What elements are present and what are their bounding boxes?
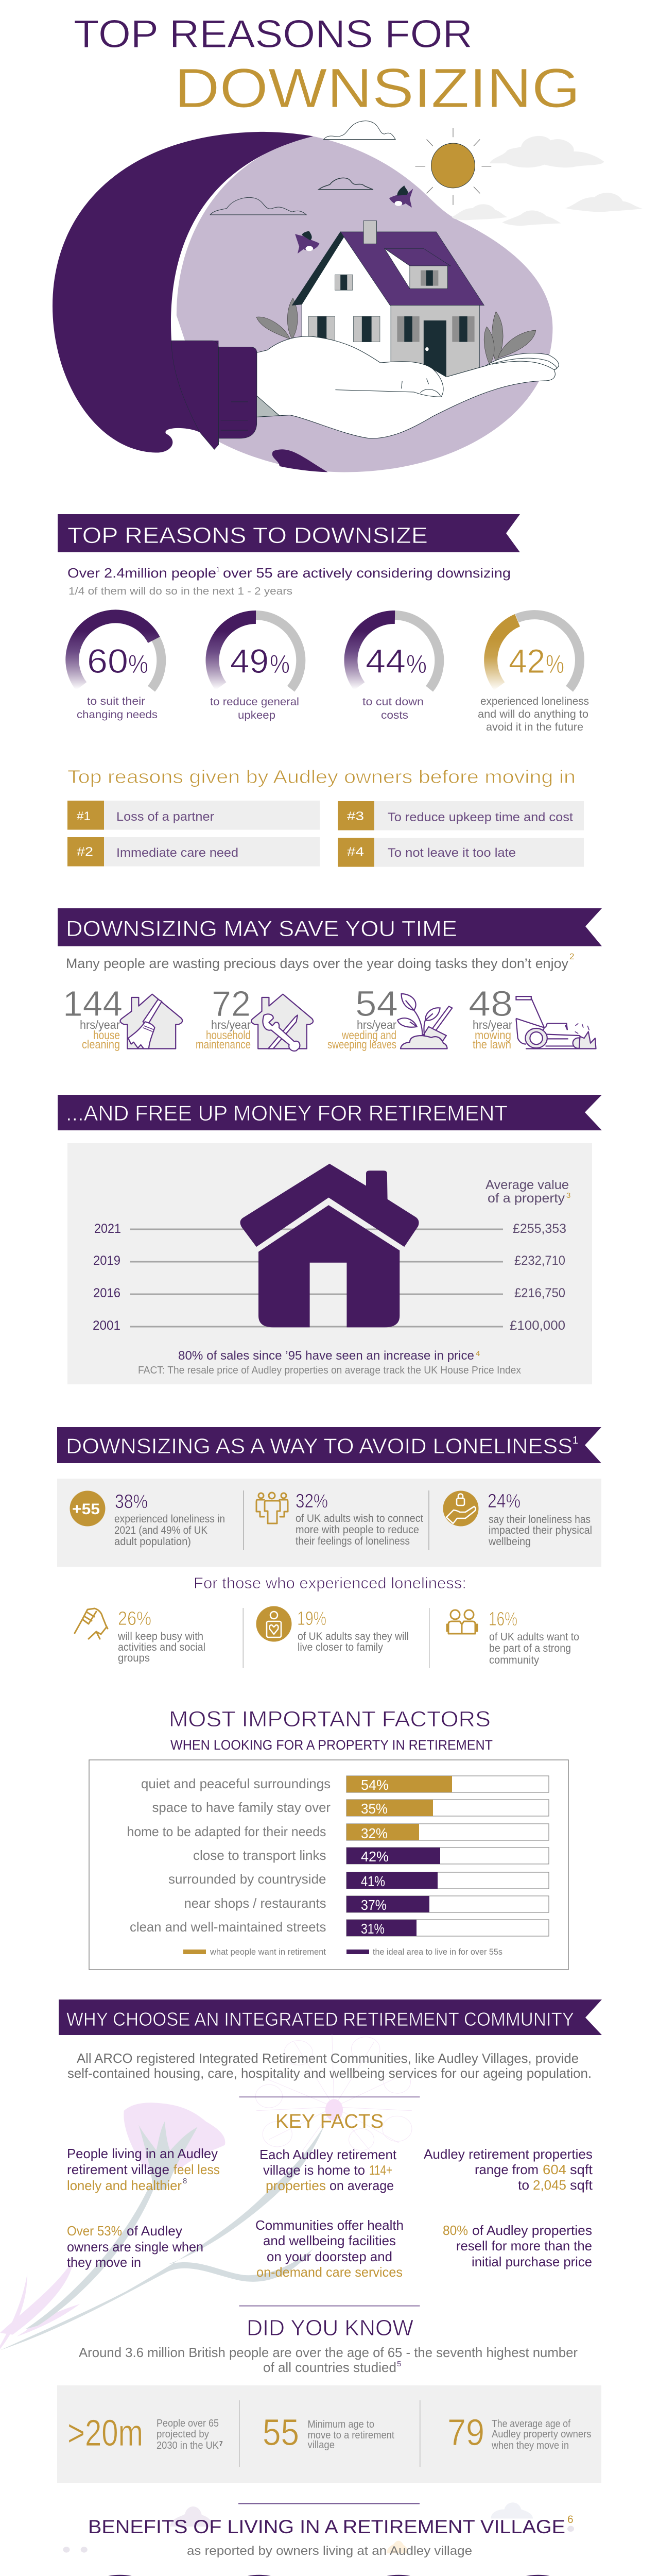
stat: 79 bbox=[447, 2412, 591, 2453]
intro paragraph: All ARCO registered Integrated Retirement Communities, like Audley Villages, provide bbox=[77, 2050, 579, 2066]
donut: 49% bbox=[210, 615, 301, 721]
stat: 54 hrs weeding: weeding and bbox=[341, 1028, 396, 1042]
stat: 48 hrs mowing: hrs/year bbox=[473, 1018, 512, 1031]
heading: most important factors bbox=[169, 1707, 493, 1753]
fact: 80% resell: 80% bbox=[443, 2223, 468, 2238]
section banner: loneliness bbox=[57, 1427, 601, 1463]
reason list: #2 bbox=[77, 845, 93, 859]
did you know heading: of all countries studied bbox=[263, 2360, 396, 2375]
donut: 60% bbox=[72, 616, 161, 721]
panel: did you know stats bbox=[57, 2385, 601, 2483]
value labels: £100,000 bbox=[510, 1318, 565, 1333]
fact: feel less lonely bbox=[67, 2146, 220, 2193]
value labels: Average value bbox=[485, 1178, 569, 1192]
donut: 42%: 42 bbox=[509, 642, 545, 680]
stat: 144 hrs house cleaning: 144 bbox=[63, 984, 123, 1024]
legend bbox=[183, 1947, 502, 1957]
reason list: Immediate care need bbox=[116, 846, 238, 860]
value labels: £255,353 bbox=[513, 1222, 566, 1236]
fact: property range bbox=[424, 2146, 593, 2193]
illustration: hand holding house bbox=[53, 121, 643, 472]
did you know heading: DID YOU KNOW bbox=[247, 2315, 413, 2341]
stat: 79: 79 bbox=[447, 2412, 484, 2453]
fact: feel less lonely: lonely and healthier bbox=[67, 2178, 182, 2193]
benefits heading bbox=[88, 2514, 574, 2558]
donut: 42% bbox=[478, 615, 589, 733]
fact: feel less lonely: People living in an Audley bbox=[67, 2146, 218, 2161]
stat: 54 hrs weeding: 54 bbox=[355, 984, 398, 1024]
fact: 80% resell bbox=[443, 2223, 592, 2269]
stat: 54 hrs weeding bbox=[327, 984, 452, 1051]
house bbox=[292, 221, 484, 377]
decorative village scene bbox=[0, 2502, 659, 2576]
stat: 24%: impacted their physical bbox=[489, 1524, 592, 1536]
year labels: 2016 bbox=[93, 1286, 120, 1300]
line above benefits bbox=[238, 2503, 420, 2504]
value labels: £232,710 bbox=[514, 1253, 565, 1268]
price note: 4 bbox=[476, 1349, 480, 1358]
bar chart: important factors: quiet and peaceful surroundings bbox=[141, 1776, 331, 1791]
bar chart: important factors: 31% bbox=[361, 1921, 385, 1937]
bar chart: important factors: 42% bbox=[361, 1849, 389, 1865]
icon: plant and shovel bbox=[397, 994, 452, 1049]
intro statement bbox=[67, 565, 511, 597]
fact: feel less lonely: retirement village bbox=[67, 2162, 169, 2177]
section banner: integrated retirement community bbox=[59, 1999, 602, 2035]
stat: 16%: community bbox=[489, 1654, 539, 1666]
panel: average property value bbox=[67, 1143, 592, 1384]
year labels: 2001 bbox=[93, 1318, 120, 1333]
bar chart: important factors: near shops / restaurants bbox=[184, 1895, 326, 1911]
price note bbox=[138, 1349, 521, 1376]
stat: 38%: experienced loneliness in bbox=[114, 1513, 225, 1525]
donut: 42%: avoid it in the future bbox=[486, 721, 583, 733]
fact: property range: Audley retirement properties bbox=[424, 2146, 593, 2162]
reason list: To reduce upkeep time and cost bbox=[388, 810, 573, 824]
section banner: free up money: ...AND FREE UP MONEY FOR RETIREMENT bbox=[66, 1101, 508, 1125]
did you know heading bbox=[79, 2306, 578, 2375]
stat: 72 hrs household maintenance: maintenance bbox=[196, 1038, 251, 1051]
fact: property range: 2,045 bbox=[533, 2177, 566, 2193]
stat: 16% bbox=[447, 1608, 579, 1666]
fact: 114+ properties: on average bbox=[330, 2178, 394, 2193]
fact: health and wellbeing bbox=[255, 2217, 404, 2280]
stat: 32% bbox=[256, 1490, 423, 1547]
stat: 55: village bbox=[308, 2439, 335, 2451]
donut: 44%: 44 bbox=[366, 642, 406, 680]
reason list bbox=[67, 801, 584, 867]
benefits heading: BENEFITS OF LIVING IN A RETIREMENT VILLAGE bbox=[88, 2516, 565, 2537]
donut: 42%: and will do anything to bbox=[478, 708, 588, 720]
stat: 32%: their feelings of loneliness bbox=[296, 1535, 410, 1547]
fact: 114+ properties: 114+ bbox=[369, 2162, 392, 2178]
donut: 44%: to cut down bbox=[362, 696, 424, 708]
cuff bbox=[171, 341, 257, 449]
reason list: #4 bbox=[347, 845, 364, 859]
heading: most important factors: WHEN LOOKING FOR A PROPERTY IN RETIREMENT bbox=[170, 1737, 493, 1753]
section banner: loneliness: DOWNSIZING AS A WAY TO AVOID LONELINESS bbox=[66, 1434, 573, 1458]
sleeve lower fold bbox=[272, 449, 328, 472]
donut: 60%: to suit their bbox=[87, 696, 145, 707]
stat: 26% bbox=[75, 1608, 205, 1664]
bar chart: important factors: surrounded by countryside bbox=[168, 1871, 326, 1887]
icon: three people bbox=[256, 1493, 288, 1523]
stat: 19%: live closer to family bbox=[298, 1641, 383, 1653]
benefits heading: as reported by owners living at an Audley village bbox=[187, 2544, 472, 2558]
section banner: loneliness: 1 bbox=[573, 1435, 578, 1446]
bar chart: important factors: home to be adapted for their needs bbox=[127, 1824, 326, 1839]
value labels bbox=[485, 1178, 570, 1333]
blob background bbox=[177, 136, 552, 472]
stat: 19%: 19% bbox=[297, 1608, 326, 1630]
bar chart: important factors: space to have family stay over bbox=[152, 1800, 331, 1815]
key facts heading: KEY FACTS bbox=[275, 2111, 384, 2132]
clouds outlined bbox=[210, 121, 395, 215]
fact: 53% single: they move in bbox=[67, 2255, 141, 2270]
stat: 19%: of UK adults say they will bbox=[298, 1631, 409, 1642]
time intro: 2 bbox=[569, 952, 574, 961]
fact: 53% single: owners are single when bbox=[67, 2239, 203, 2255]
stat: 38%: 38% bbox=[115, 1491, 148, 1513]
donut: 42%: experienced loneliness bbox=[480, 696, 589, 707]
fact: property range: to bbox=[518, 2177, 529, 2193]
did you know heading: Around 3.6 million British people are over the age of 65 - the seventh highest number bbox=[79, 2345, 578, 2360]
stat: 144 hrs house cleaning: house bbox=[93, 1028, 120, 1042]
price note: FACT: The resale price of Audley properties on average track the UK House Price Index bbox=[138, 1365, 521, 1376]
fact: health and wellbeing: on your doorstep and bbox=[267, 2249, 392, 2264]
reason list: Loss of a partner bbox=[116, 810, 214, 824]
reason list: To not leave it too late bbox=[388, 846, 516, 860]
stat: 144 hrs house cleaning: hrs/year bbox=[80, 1018, 120, 1031]
stat: 79: Audley property owners bbox=[492, 2429, 591, 2440]
plants bbox=[256, 298, 536, 364]
section banner: integrated retirement community: WHY CHOOSE AN INTEGRATED RETIREMENT COMMUNITY bbox=[66, 2009, 574, 2030]
fact: property range: range from bbox=[475, 2162, 539, 2177]
stat: 38%: 2021 (and 49% of UK bbox=[114, 1524, 207, 1536]
section banner: save you time: DOWNSIZING MAY SAVE YOU TIME bbox=[66, 917, 457, 941]
sun bbox=[431, 143, 475, 188]
stat: 72 hrs household maintenance: hrs/year bbox=[211, 1018, 251, 1031]
value labels: 3 bbox=[566, 1191, 570, 1200]
fact: 114+ properties: village is home to bbox=[263, 2162, 365, 2178]
bar chart: important factors: clean and well-maintained streets bbox=[130, 1919, 326, 1935]
stat: 54 hrs weeding: hrs/year bbox=[357, 1018, 396, 1031]
bar chart: important factors: 41% bbox=[361, 1873, 385, 1889]
stat: 54 hrs weeding: sweeping leaves bbox=[327, 1038, 396, 1051]
intro statement: 1 bbox=[216, 566, 220, 573]
stat: 32%: more with people to reduce bbox=[296, 1524, 419, 1536]
stat: over 20m: 7 bbox=[219, 2440, 223, 2447]
key facts bbox=[67, 2146, 593, 2280]
stat: 48 hrs mowing: the lawn bbox=[473, 1038, 511, 1051]
clouds and dots bbox=[170, 2506, 212, 2527]
stat: 32%: of UK adults wish to connect bbox=[296, 1513, 423, 1524]
fact: 80% resell: resell for more than the bbox=[456, 2238, 592, 2253]
fact: 114+ properties: Each Audley retirement bbox=[259, 2147, 397, 2162]
heading: for those who experienced loneliness: For those who experienced loneliness: bbox=[194, 1574, 466, 1592]
donut: 49%: % bbox=[270, 650, 290, 679]
section banner: save you time bbox=[58, 908, 602, 946]
intro statement: over 55 are actively considering downsizing bbox=[223, 565, 511, 581]
fact: health and wellbeing: Communities offer health bbox=[255, 2217, 404, 2233]
section banner: top reasons to downsize: TOP REASONS TO DOWNSIZE bbox=[67, 523, 428, 548]
row: loneliness responses bbox=[75, 1606, 579, 1668]
donut: 49%: upkeep bbox=[238, 709, 275, 721]
stat: 24%: say their loneliness has bbox=[489, 1514, 591, 1526]
reason list: #1 bbox=[77, 809, 91, 823]
heading: most important factors: MOST IMPORTANT FACTORS bbox=[169, 1707, 491, 1732]
icon: hand with lock bbox=[446, 1494, 476, 1523]
legend: the ideal area to live in for over 55s bbox=[373, 1947, 502, 1957]
value labels: of a property bbox=[488, 1191, 565, 1206]
stat: 26%: activities and social bbox=[118, 1641, 205, 1653]
stat: 24%: 24% bbox=[488, 1490, 521, 1512]
year labels bbox=[93, 1222, 121, 1333]
fact: health and wellbeing: and wellbeing facilities bbox=[263, 2233, 396, 2248]
stat: 144 hrs house cleaning: cleaning bbox=[82, 1038, 120, 1051]
stat: 16%: of UK adults want to bbox=[489, 1631, 579, 1643]
birds bbox=[389, 185, 413, 208]
donut: 60%: changing needs bbox=[77, 709, 158, 721]
stat: 24% bbox=[443, 1490, 592, 1548]
title: TOP REASONS FOR bbox=[74, 12, 473, 56]
stat: 26%: groups bbox=[118, 1652, 150, 1664]
stat: over 20m: 2030 in the UK bbox=[157, 2440, 219, 2451]
fact: property range: 604 bbox=[543, 2162, 566, 2177]
stat: over 20m: projected by bbox=[157, 2429, 209, 2440]
decorative dandelion bbox=[0, 2035, 412, 2350]
stat: 55 bbox=[263, 2412, 394, 2453]
intro paragraph: self-contained housing, care, hospitality and wellbeing services for our ageing population. bbox=[67, 2065, 592, 2081]
bar chart: important factors: close to transport links bbox=[193, 1848, 326, 1863]
section banner: top reasons to downsize bbox=[58, 514, 520, 552]
title: DOWNSIZING bbox=[175, 57, 580, 119]
grey clouds bbox=[452, 136, 643, 226]
bar chart: important factors: 35% bbox=[361, 1801, 388, 1817]
sleeve bbox=[53, 132, 313, 453]
fact: 53% single: of Audley bbox=[127, 2223, 182, 2239]
stat: 38%: adult population) bbox=[114, 1536, 191, 1548]
stat: 38% bbox=[70, 1491, 225, 1548]
year labels: 2021 bbox=[94, 1222, 121, 1236]
stat: over 20m: >20m bbox=[67, 2413, 143, 2454]
fact: 114+ properties bbox=[259, 2147, 397, 2193]
donut: 49%: to reduce general bbox=[210, 696, 299, 708]
reason list: #3 bbox=[347, 809, 364, 823]
fact: 80% resell: of Audley properties bbox=[472, 2223, 592, 2238]
fact: 53% single: Over 53% bbox=[67, 2223, 122, 2239]
stat: 79: when they move in bbox=[491, 2440, 569, 2451]
hand bbox=[257, 396, 280, 417]
legend: what people want in retirement bbox=[210, 1947, 326, 1957]
donut: 42%: % bbox=[546, 650, 564, 679]
panel: loneliness stats bbox=[57, 1479, 601, 1567]
title bbox=[74, 12, 580, 119]
stat: 26%: will keep busy with bbox=[117, 1631, 203, 1642]
icon: couple bbox=[447, 1610, 477, 1634]
donut: 44% bbox=[351, 615, 439, 721]
icon: house with broom bbox=[120, 994, 182, 1049]
section banner: free up money bbox=[58, 1095, 602, 1130]
intro statement: Over 2.4million people bbox=[67, 565, 216, 581]
fact: 114+ properties: properties bbox=[266, 2178, 326, 2193]
donut: 60%: 60 bbox=[87, 642, 128, 680]
stat: 144 hrs house cleaning bbox=[63, 984, 182, 1051]
year labels: 2019 bbox=[93, 1253, 120, 1268]
fact: feel less lonely: 8 bbox=[183, 2177, 187, 2185]
fact: 53% single bbox=[67, 2223, 203, 2270]
benefits heading: 6 bbox=[567, 2514, 574, 2526]
did you know heading: 5 bbox=[397, 2360, 401, 2368]
stat: 72 hrs household maintenance bbox=[196, 984, 313, 1051]
bar chart: important factors: 54% bbox=[361, 1777, 389, 1793]
stat: 24%: wellbeing bbox=[488, 1536, 531, 1548]
stat: 32%: 32% bbox=[296, 1490, 328, 1512]
stat: 19% bbox=[256, 1606, 409, 1653]
stat: over 20m bbox=[67, 2413, 223, 2454]
stat: 55: 55 bbox=[263, 2412, 299, 2453]
stat: 16%: be part of a strong bbox=[489, 1642, 571, 1654]
icon: person with heart bbox=[267, 1612, 281, 1637]
donut: 49%: 49 bbox=[230, 642, 269, 680]
donut: 44%: costs bbox=[381, 709, 408, 721]
stat: 48 hrs mowing bbox=[469, 984, 596, 1051]
bar chart: important factors: 37% bbox=[361, 1897, 387, 1913]
value labels: £216,750 bbox=[514, 1286, 565, 1300]
intro statement: 1/4 of them will do so in the next 1 - 2 years bbox=[68, 586, 292, 597]
donut: 44%: % bbox=[406, 650, 427, 679]
icon: lawn mower bbox=[516, 996, 596, 1049]
stat: 48 hrs mowing: 48 bbox=[469, 984, 513, 1024]
bar chart: important factors bbox=[89, 1760, 568, 1970]
stat: 72 hrs household maintenance: 72 bbox=[212, 984, 251, 1024]
donut: 60%: % bbox=[128, 650, 148, 679]
stat: 55: move to a retirement bbox=[308, 2430, 394, 2441]
bar chart: important factors: 32% bbox=[361, 1825, 388, 1841]
stat: 55: Minimum age to bbox=[308, 2419, 374, 2430]
stat: 26%: 26% bbox=[118, 1608, 151, 1630]
stat: 38%: +55 bbox=[72, 1501, 100, 1518]
fact: property range: sqft bbox=[570, 2162, 593, 2177]
time intro: Many people are wasting precious days over the year doing tasks they don’t enjoy bbox=[66, 956, 568, 971]
stat: 48 hrs mowing: mowing bbox=[475, 1028, 511, 1042]
stat: over 20m: People over 65 bbox=[157, 2418, 219, 2429]
heading: top reasons given by owners: Top reasons given by Audley owners before moving in bbox=[67, 766, 576, 787]
fact: 80% resell: initial purchase price bbox=[472, 2254, 592, 2269]
fact: feel less lonely: feel less bbox=[174, 2162, 220, 2177]
stat: 72 hrs household maintenance: household bbox=[206, 1028, 251, 1042]
fact: property range: sqft bbox=[570, 2177, 593, 2193]
stat: 16%: 16% bbox=[489, 1608, 517, 1630]
icon: house with tools bbox=[251, 994, 313, 1051]
icon: clasped hands bbox=[75, 1608, 108, 1639]
fact: health and wellbeing: on-demand care services bbox=[256, 2264, 403, 2280]
price note: 80% of sales since ’95 have seen an increase in price bbox=[178, 1349, 474, 1363]
windows bbox=[308, 270, 475, 377]
stat: 79: The average age of bbox=[492, 2418, 570, 2430]
icon: house bbox=[240, 1164, 419, 1327]
intro paragraph bbox=[67, 2050, 592, 2081]
